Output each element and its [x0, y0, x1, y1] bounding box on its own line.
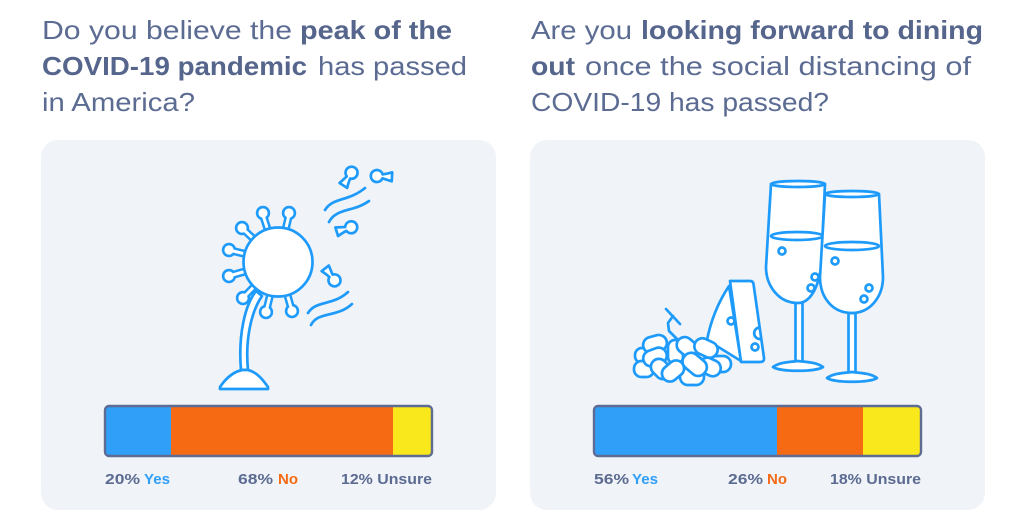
legend: peak passed: No: [278, 471, 298, 488]
legend: peak passed: Yes: [144, 471, 170, 488]
champagne glass front: [820, 191, 883, 382]
virus body: [244, 228, 312, 296]
stacked bar: peak passed: [105, 406, 432, 456]
heading: peak of pandemic question: [42, 15, 467, 117]
flower stem: [240, 291, 262, 370]
panel background left: [41, 140, 496, 510]
icon: wine, cheese and grapes: [634, 181, 883, 385]
heading: dining out question: out: [531, 51, 575, 81]
heading: dining out question: looking forward to dining: [641, 15, 983, 45]
blown seeds: [320, 164, 392, 289]
panel background right: [530, 140, 985, 510]
legend: dining out: 26%: [728, 471, 763, 488]
legend: dining out: 56%: [594, 471, 629, 488]
legend: peak passed: [105, 471, 432, 488]
legend: peak passed: 12% Unsure: [341, 471, 432, 488]
legend: dining out: Yes: [632, 471, 658, 488]
grapes: [634, 309, 731, 385]
heading: peak of pandemic question: COVID-19 pandemic: [42, 51, 307, 81]
heading: peak of pandemic question: Do you believe the: [42, 15, 292, 45]
legend: dining out: [594, 471, 921, 488]
stacked bar: dining out: [594, 406, 921, 456]
heading: dining out question: [531, 15, 983, 117]
heading: dining out question: COVID-19 has passed?: [531, 87, 829, 117]
cheese wedge: [707, 281, 764, 362]
legend: peak passed: 68%: [238, 471, 273, 488]
heading: dining out question: once the social distancing of: [585, 51, 972, 81]
flower base: [220, 370, 268, 389]
wind lines: [308, 188, 369, 325]
legend: dining out: No: [767, 471, 787, 488]
panel: pandemic peak: [41, 140, 496, 510]
champagne glass back: [766, 181, 825, 371]
heading: peak of pandemic question: peak of the: [300, 15, 452, 45]
heading: peak of pandemic question: has passed: [318, 51, 467, 81]
legend: dining out: 18% Unsure: [830, 471, 921, 488]
virus spikes: [222, 206, 299, 319]
heading: peak of pandemic question: in America?: [42, 87, 195, 117]
heading: dining out question: Are you: [531, 15, 632, 45]
legend: peak passed: 20%: [105, 471, 140, 488]
icon: coronavirus dandelion: [220, 164, 392, 389]
panel: dining out: [530, 140, 985, 510]
